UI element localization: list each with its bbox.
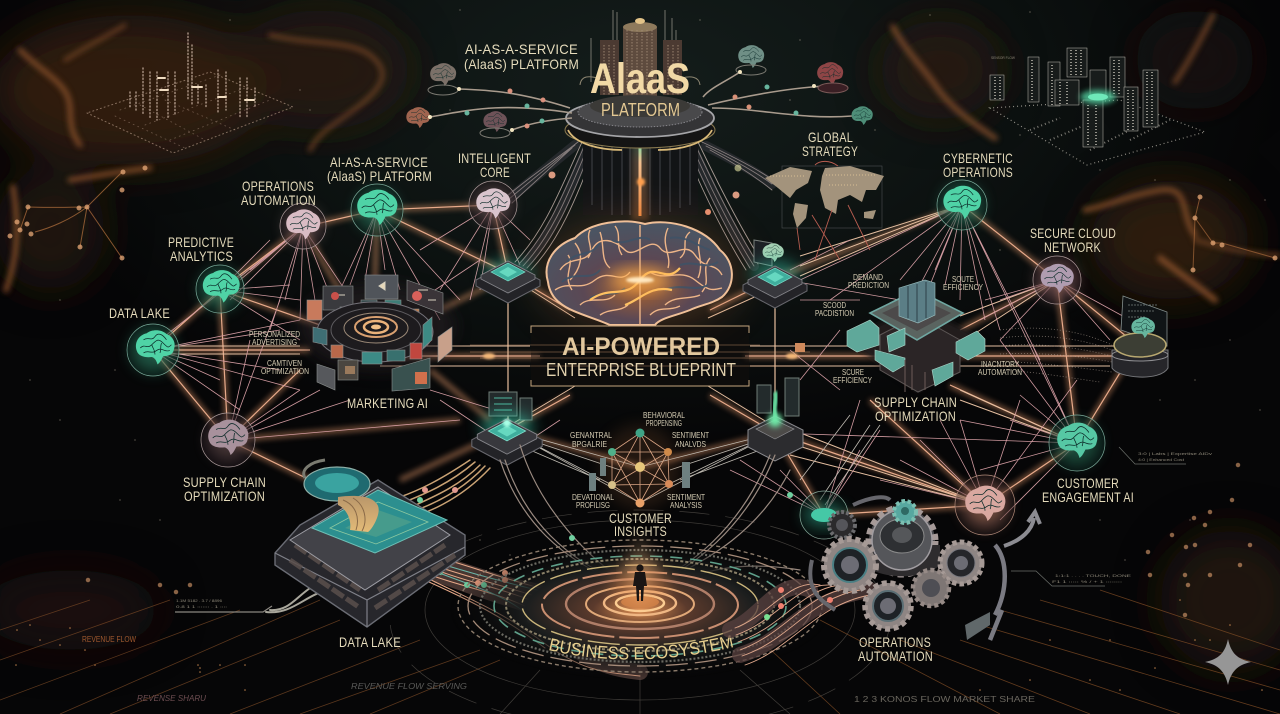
label: intelligent core: CORE	[480, 164, 510, 180]
node: data lake brain	[127, 324, 179, 376]
insights small labels: SENTIMENT	[672, 431, 709, 440]
supply chain small labels: AUTOMATION	[978, 368, 1022, 377]
hub: lower right	[748, 378, 803, 461]
market share label: 1 2 3 KONOS FLOW MARKET SHARE	[854, 695, 1035, 704]
hub: upper left	[476, 261, 540, 303]
label: customer engagement AI: ENGAGEMENT AI	[1042, 489, 1134, 505]
operations stream to gears	[730, 584, 870, 665]
world map	[765, 161, 884, 260]
label: supply chain right: SUPPLY CHAIN	[874, 394, 957, 410]
insights small labels: PROPENSING	[646, 419, 682, 428]
label: customer insights: CUSTOMER	[609, 510, 672, 526]
label: supply chain left	[183, 474, 266, 504]
data lake building	[275, 460, 465, 627]
label: AI-as-a-Service top: AI-AS-A-SERVICE	[465, 41, 578, 57]
insights small labels: BEHAVIORAL	[643, 411, 685, 420]
data lake callout: 1.1M 5182 . 3.7 / 8896	[176, 598, 223, 603]
gear: lower left	[865, 583, 911, 629]
label: campaign optimization: OPTIMIZATION	[261, 367, 309, 376]
label: AIaaS left: (AlaaS) PLATFORM	[327, 168, 432, 184]
central brain	[540, 220, 740, 330]
label: cybernetic operations: CYBERNETIC	[943, 150, 1013, 166]
customer engagement callout	[1119, 447, 1212, 464]
platform disc	[565, 77, 715, 150]
label: operations automation bottom: OPERATIONS	[859, 634, 931, 650]
label: business ecosystem: BUSINESS ECOSYSTEM	[549, 635, 733, 660]
label: campaign optimization: CAMTIVEN	[267, 359, 302, 368]
insights small labels: DEVATIONAL	[572, 493, 614, 502]
insights small labels: GENANTRAL	[570, 431, 612, 440]
insights small labels: ANALVDS	[675, 440, 706, 449]
city wireframe: top right	[990, 48, 1205, 165]
hub: lower left	[472, 392, 542, 465]
title panel	[470, 326, 810, 386]
label: predictive analytics	[168, 234, 234, 264]
gears callout: F1 1 ::::: % / + 1 ::::::::	[1052, 579, 1122, 584]
label: operations automation bottom	[858, 634, 933, 664]
revenue flow orange label: REVENUE FLOW	[82, 635, 136, 644]
label: secure cloud network: SECURE CLOUD	[1030, 225, 1116, 241]
ring ellipses	[317, 302, 433, 362]
node: predictive analytics brain	[196, 265, 244, 313]
node: secure cloud brain	[1033, 256, 1081, 304]
pool	[312, 490, 447, 553]
watermark star	[1205, 639, 1251, 685]
label: campaign optimization	[261, 359, 309, 376]
data lake callout: 0.8 1 1 ::::::: . 1 ::::	[176, 604, 227, 609]
revenue flow serving label: REVENUE FLOW SERVING	[351, 682, 467, 691]
insights small labels	[570, 411, 709, 510]
supply chain small labels	[815, 273, 1022, 385]
node: customer engagement brain	[1049, 415, 1105, 471]
label: personalized advertising: PERSONALIZED	[249, 330, 300, 339]
data streams and lake cables	[266, 445, 800, 676]
label: customer engagement AI: CUSTOMER	[1057, 475, 1119, 491]
label: personalized advertising: ADVERTISING	[252, 338, 297, 347]
node: operations automation brain	[280, 203, 326, 249]
brain folds	[555, 225, 722, 325]
supply chain small labels: INACNTORY	[981, 360, 1020, 369]
data lake callout	[175, 598, 272, 612]
supply chain small labels: EFFICIENCY	[833, 376, 873, 385]
label: supply chain right: OPTIMIZATION	[875, 408, 956, 424]
city caption: SENSOR FLOW	[991, 55, 1015, 60]
gear: small dark	[829, 512, 855, 538]
person silhouette	[633, 564, 647, 601]
AIaaS platform title: AlaaS	[590, 55, 690, 103]
customer engagement callout: 4:0 | Enhanced Cost	[1138, 457, 1185, 462]
bottom perspective lines: right	[760, 590, 1280, 714]
mesh fabric near right platform	[1000, 328, 1112, 382]
label: predictive analytics: PREDICTIVE	[168, 234, 234, 250]
back screens	[307, 275, 443, 325]
operations gears	[810, 497, 1040, 640]
supply chain small labels: SCOOD	[823, 301, 846, 310]
server blocks	[899, 280, 935, 323]
business ecosystem vortex	[450, 540, 830, 680]
label: AIaaS left	[327, 154, 432, 184]
subtitle text: ENTERPRISE BLUEPRINT	[546, 360, 736, 380]
teal cargo boxes	[847, 320, 985, 386]
insights small labels: SENTIMENT	[667, 493, 705, 502]
supply chain small labels: SOUTE	[952, 275, 974, 284]
label: data lake left: DATA LAKE	[109, 305, 170, 321]
customer insights network	[589, 425, 690, 509]
insights small labels: PROFILISG	[576, 501, 610, 510]
label: data lake bottom: DATA LAKE	[339, 634, 401, 650]
curved arrow	[1004, 512, 1040, 546]
gear: right	[940, 542, 982, 584]
node: supply chain brain	[201, 413, 255, 467]
right holographic platform	[1112, 296, 1168, 377]
satellite brains and links around platform	[406, 45, 873, 138]
building base	[275, 480, 465, 627]
label: customer engagement AI	[1042, 475, 1134, 505]
supply chain small labels: PACDISTION	[815, 309, 854, 318]
bottom perspective lines: left	[0, 600, 500, 714]
hub: upper right	[743, 240, 807, 308]
label: predictive analytics: ANALYTICS	[170, 248, 233, 264]
label: global strategy	[802, 129, 858, 159]
insights small labels: BPGALRIE	[572, 440, 607, 449]
constellation right	[1193, 197, 1275, 270]
gear: lower middle	[913, 570, 949, 606]
label: supply chain right	[874, 394, 957, 424]
top disc	[304, 467, 370, 501]
nebula streaks	[6, 15, 1280, 300]
label: customer insights: INSIGHTS	[614, 523, 667, 539]
AIaaS platform title: PLATFORM	[601, 100, 680, 120]
gears callout	[1011, 571, 1132, 586]
gear: large centre	[865, 508, 940, 576]
node: teal lower brain	[800, 491, 848, 539]
revenue share label: REVENSE SHARU	[137, 694, 206, 703]
supply chain building	[847, 280, 985, 392]
label: operations automation bottom: AUTOMATION	[858, 648, 933, 664]
label: AI-as-a-Service top	[464, 41, 579, 72]
label: secure cloud network: NETWORK	[1044, 239, 1101, 255]
label: operations automation left: AUTOMATION	[241, 192, 316, 208]
label: global strategy: STRATEGY	[802, 143, 858, 159]
node: intelligent core brain	[469, 181, 517, 229]
customer engagement callout: 3:0 | Labs | Expertise AIDv	[1138, 451, 1212, 456]
label: supply chain left: SUPPLY CHAIN	[183, 474, 266, 490]
label: marketing AI: MARKETING AI	[347, 395, 428, 411]
supply chain small labels: SCURE	[842, 368, 864, 377]
label: supply chain left: OPTIMIZATION	[184, 488, 265, 504]
label: secure cloud network	[1030, 225, 1116, 255]
label: operations automation left	[241, 178, 316, 208]
label: cybernetic operations	[943, 150, 1013, 180]
supply chain small labels: EFFICIENCY	[943, 283, 984, 292]
label: intelligent core: INTELLIGENT	[458, 150, 531, 166]
title text: AI-POWERED	[562, 333, 720, 361]
node: AIaaS teal brain	[351, 184, 403, 236]
city wireframe: top left	[87, 33, 293, 153]
label: cybernetic operations: OPERATIONS	[943, 164, 1013, 180]
radial ground arcs	[390, 510, 890, 714]
marketing AI ring	[299, 275, 455, 391]
insights small labels: ANALYSIS	[670, 501, 702, 510]
node: pink lower brain	[955, 475, 1015, 535]
cables from platform	[505, 142, 772, 270]
label: global strategy: GLOBAL	[808, 129, 853, 145]
vortex rings	[458, 540, 822, 672]
network glow beams	[153, 205, 1137, 515]
AIaaS platform tower	[565, 0, 715, 220]
front screens	[313, 317, 452, 391]
tower blocks	[600, 18, 682, 99]
AIaaS platform title	[590, 55, 690, 120]
waterfall	[338, 496, 379, 532]
node: cybernetic operations brain	[937, 180, 987, 230]
network bright lines	[153, 205, 1137, 520]
connector hubs	[472, 240, 807, 465]
supply chain small labels: PREDICTION	[848, 281, 889, 290]
label: intelligent core	[458, 150, 531, 180]
label: personalized advertising	[249, 330, 300, 347]
label: customer insights	[609, 510, 672, 539]
label: AIaaS left: AI-AS-A-SERVICE	[330, 154, 428, 170]
label: operations automation left: OPERATIONS	[242, 178, 314, 194]
label: AI-as-a-Service top: (AlaaS) PLATFORM	[464, 56, 579, 72]
gears callout: 1:1:1 . . . . TOUCH, DONE	[1055, 573, 1132, 578]
gear: left	[824, 539, 876, 591]
supply chain small labels: DEMAND	[853, 273, 883, 282]
lower shaft	[583, 134, 698, 220]
gear: teal top	[894, 501, 916, 523]
constellation left	[20, 172, 122, 258]
